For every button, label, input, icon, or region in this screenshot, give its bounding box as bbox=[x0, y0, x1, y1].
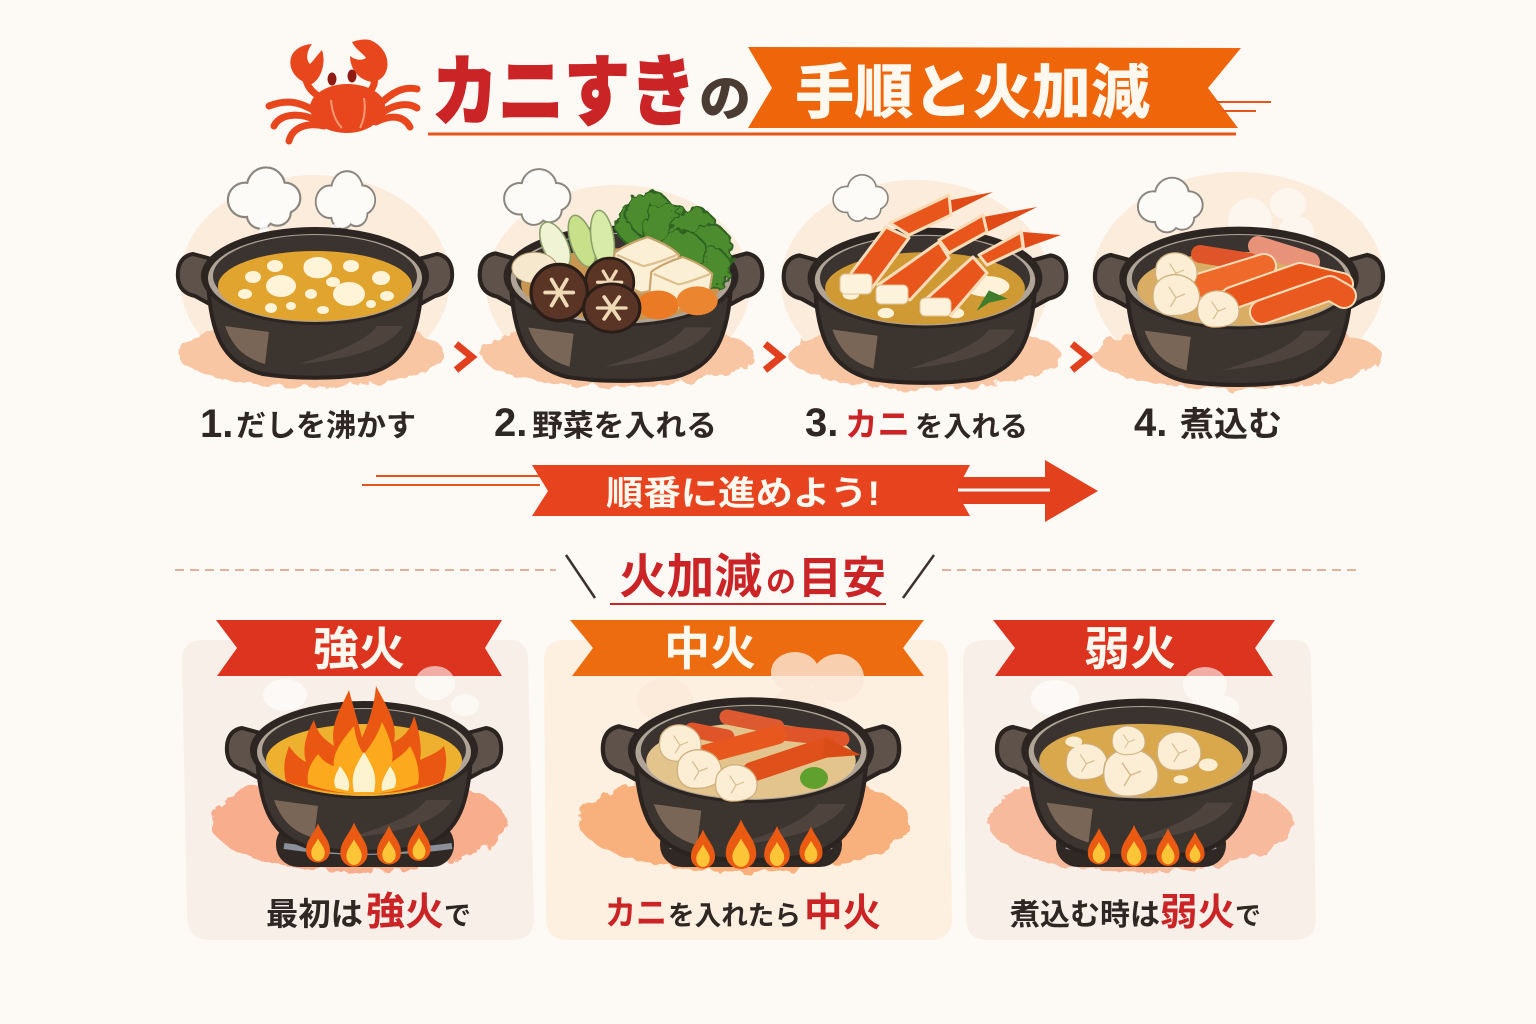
icon: steam cloud bbox=[1139, 179, 1202, 231]
arrow: step 2 to 3 bbox=[765, 344, 781, 370]
label: step 3: 3. bbox=[805, 401, 838, 445]
crab legs bbox=[846, 195, 1023, 315]
pot with simmered crab bbox=[1095, 227, 1383, 385]
glow backdrop bbox=[486, 185, 750, 385]
caption: カニ bbox=[605, 895, 667, 933]
section heading: heat guide bbox=[175, 551, 1362, 604]
crab claws bbox=[951, 192, 1061, 248]
burner bbox=[660, 822, 842, 867]
pot with simmering broth bbox=[997, 699, 1285, 857]
caption: で bbox=[444, 901, 471, 931]
label: step 3 bbox=[805, 401, 1028, 445]
panel background bbox=[182, 640, 534, 940]
carrots bbox=[637, 290, 679, 319]
icon: steam cloud bbox=[505, 170, 569, 224]
arrow: step 1 to 2 bbox=[456, 344, 472, 370]
caption: を入れたら bbox=[668, 901, 801, 931]
flames under pot bbox=[691, 820, 823, 869]
pot with broth bbox=[178, 227, 452, 378]
label: step 1: だしを沸かす bbox=[236, 410, 416, 443]
heading text bbox=[619, 551, 886, 604]
label: step 3: カニ bbox=[845, 406, 910, 443]
caption: 中火 bbox=[804, 892, 881, 935]
caption: 強火 bbox=[366, 891, 444, 934]
ribbon text: 順番に進めよう! bbox=[606, 475, 880, 513]
crab meat chunks bbox=[1153, 253, 1239, 327]
crab meat bbox=[840, 274, 951, 316]
caption: で bbox=[1235, 901, 1261, 931]
crab pieces bbox=[1192, 246, 1344, 312]
label: step 1: 1. bbox=[200, 402, 233, 446]
caption bbox=[266, 891, 471, 934]
caption bbox=[1010, 892, 1261, 934]
panel background bbox=[544, 640, 952, 940]
caption: 煮込む時は bbox=[1010, 899, 1160, 932]
ribbon: 弱火: 弱火 bbox=[1084, 623, 1176, 675]
soft steam bbox=[1031, 667, 1239, 722]
burner bbox=[276, 822, 454, 867]
pot with crab bbox=[603, 697, 899, 860]
burner mat blotch bbox=[481, 321, 753, 387]
label: step 2: 野菜を入れる bbox=[532, 410, 717, 443]
label: step 4: 煮込む bbox=[1180, 406, 1282, 444]
icon: steam cloud bbox=[834, 176, 887, 220]
title ribbon bbox=[748, 47, 1241, 128]
burner mat blotch bbox=[789, 323, 1061, 389]
step 3: add crab bbox=[781, 176, 1066, 445]
label: step 4 bbox=[1134, 401, 1282, 445]
ribbon: 強火 bbox=[216, 620, 502, 676]
heading text: の bbox=[766, 566, 796, 599]
crab pieces bbox=[692, 717, 842, 772]
ribbon: 中火: 中火 bbox=[664, 623, 756, 675]
glow backdrop bbox=[781, 180, 1049, 384]
panel background bbox=[963, 640, 1316, 940]
title: カニすき: カニすき bbox=[432, 50, 696, 136]
icon: crab bbox=[269, 39, 417, 141]
mushrooms bbox=[586, 258, 634, 306]
soft steam bbox=[263, 666, 479, 716]
panel: high heat bbox=[182, 620, 534, 940]
crab meat chunks bbox=[660, 725, 828, 801]
label: step 3: を入れる bbox=[915, 411, 1028, 442]
title particle: の: の bbox=[699, 71, 751, 127]
flames under pot bbox=[1088, 825, 1205, 867]
burner mat blotch bbox=[579, 772, 911, 872]
soft steam bbox=[637, 652, 864, 725]
burner mat blotch bbox=[1094, 323, 1382, 389]
glow backdrop bbox=[180, 175, 450, 385]
arrow bbox=[955, 460, 1098, 522]
label: step 4: 4. bbox=[1134, 401, 1167, 445]
title underline bbox=[428, 132, 1236, 136]
tofu bbox=[612, 237, 679, 293]
soft steam bbox=[1228, 188, 1314, 248]
crab claw tip bbox=[822, 738, 861, 758]
label: step 1 bbox=[200, 402, 416, 446]
label: step 2: 2. bbox=[494, 401, 527, 445]
pot with flames bbox=[227, 686, 501, 852]
ribbon: 強火: 強火 bbox=[313, 623, 405, 675]
glow backdrop bbox=[1092, 172, 1384, 388]
pot with vegetables bbox=[480, 192, 762, 381]
burner mat blotch bbox=[210, 772, 506, 872]
heading text: 火加減 bbox=[619, 551, 762, 604]
pot with broth bbox=[784, 228, 1066, 383]
icon: steam clouds bbox=[229, 169, 374, 265]
leeks bbox=[533, 209, 618, 273]
step 2: add vegetables bbox=[480, 170, 762, 445]
step 4: simmer bbox=[1092, 172, 1384, 445]
ribbon bbox=[532, 465, 970, 516]
burner mat blotch bbox=[988, 772, 1292, 872]
step 1: boil broth bbox=[177, 169, 452, 446]
flames under pot bbox=[306, 822, 431, 867]
heading text: 目安 bbox=[798, 554, 886, 603]
title ribbon: 手順と火加減 bbox=[795, 60, 1150, 126]
caption: 弱火 bbox=[1160, 892, 1235, 934]
title block bbox=[269, 39, 1271, 141]
ribbon: 中火 bbox=[570, 620, 924, 676]
arrow: step 3 to 4 bbox=[1072, 344, 1088, 370]
panel: low heat bbox=[963, 620, 1316, 940]
caption bbox=[605, 892, 881, 935]
progress banner with arrow bbox=[362, 460, 1098, 522]
label: step 2 bbox=[494, 401, 717, 445]
burner bbox=[1056, 822, 1226, 867]
panel: medium heat bbox=[544, 620, 952, 940]
leafy greens bbox=[617, 192, 732, 288]
ribbon: 弱火 bbox=[993, 620, 1275, 676]
caption: 最初は bbox=[266, 896, 363, 932]
burner mat blotch bbox=[177, 321, 445, 387]
